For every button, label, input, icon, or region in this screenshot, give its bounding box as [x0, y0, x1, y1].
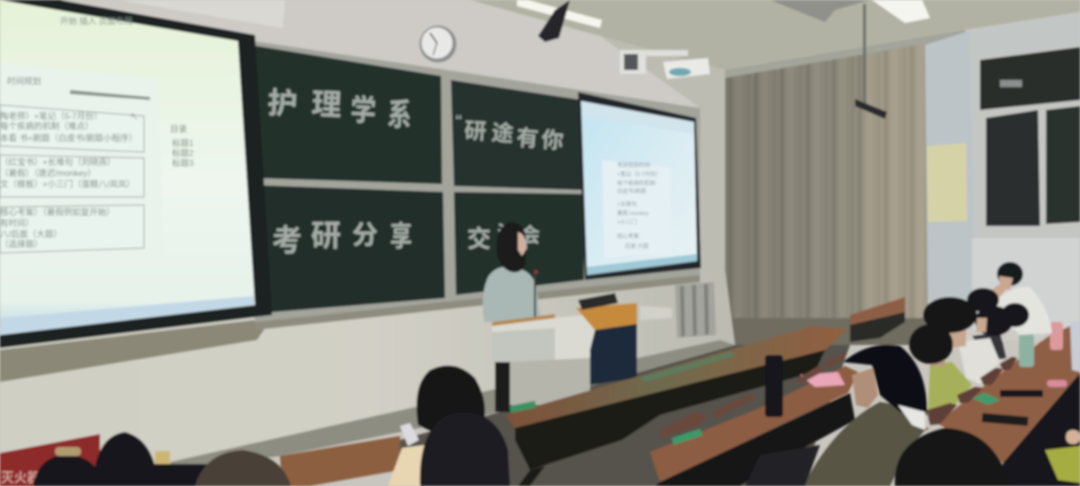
desk row 3 [937, 322, 1080, 486]
curtain [725, 44, 928, 318]
right projection screen [578, 92, 701, 280]
left projection screen: 陶老师）+笔记（5-7月份） [0, 111, 102, 121]
extinguisher sign [0, 434, 100, 486]
student: white shirt [923, 297, 1000, 384]
projector [620, 50, 710, 79]
lectern [492, 293, 672, 405]
blackboard: 交流会 panel: 交 [467, 225, 491, 253]
shadow band below blackboard [255, 272, 700, 330]
blackboard: “研”途有你 panel: 你 [541, 127, 564, 154]
blackboard: 交流会 panel: 会 [520, 224, 540, 247]
blackboard: 考研分享 panel: 考 [272, 225, 302, 258]
chairs right row [888, 357, 1017, 453]
blackboard: “研”途有你 panel: “ [455, 112, 462, 129]
students bottom left [33, 432, 291, 486]
right projection screen: 每个疾病的机制 [617, 179, 656, 187]
upper wall [0, 0, 1080, 340]
left projection screen: 标题1 [172, 138, 194, 148]
left projection screen: 本看 书+刷题（白皮书/刷题小程序） [0, 133, 137, 143]
hand [1066, 430, 1080, 444]
blackboard: 护理学系 panel: 理 [311, 88, 342, 123]
left projection screen: 每个疾病的机制（难点） [0, 121, 94, 131]
blackboard frame [247, 40, 700, 322]
right projection screen: +小三门 [617, 218, 637, 226]
blackboard: 交流会 panel: 流 [497, 222, 517, 245]
blackboard: “研”途有你 panel: 研 [464, 118, 487, 144]
left projection screen: 时间规划 [7, 76, 41, 86]
right projection screen: +长难句 [617, 200, 637, 208]
right projection screen: 暑假 monkey [617, 209, 649, 217]
radiator [675, 282, 716, 338]
small wooden table bottom left [280, 436, 400, 486]
blackboard: 护理学系 panel: 系 [387, 97, 412, 133]
student: seated woman with phone [388, 366, 510, 486]
right projection screen: 后面 大题 [625, 242, 649, 250]
window [979, 45, 1080, 238]
left projection screen: （暑假）（唐迟/monkey） [0, 168, 96, 178]
left projection screen: ↖ [130, 112, 139, 122]
poster [927, 143, 967, 222]
student: man at back [967, 262, 1052, 335]
side wall behind projector [600, 36, 735, 345]
desk row 2 [650, 355, 858, 486]
left projection screen: 标题3 [172, 158, 194, 168]
back small table [850, 297, 905, 342]
blackboard: 考研分享 panel [254, 185, 445, 313]
shadow below left screen [0, 318, 272, 382]
blackboard: 交流会 panel [454, 192, 584, 295]
right projection screen: 白皮书/刷题 [617, 187, 647, 195]
left projection screen: （红宝书）+长难句（刘晓燕） [0, 157, 115, 167]
desk row 1 [505, 326, 847, 486]
screen housing [118, 0, 285, 28]
blackboard: 考研分享 panel: 分 [352, 220, 378, 250]
left projection screen: 八/后面（大题） [0, 229, 62, 239]
desk chairs row 2 [660, 352, 845, 438]
blackboard: “研”途有你 panel [451, 80, 584, 190]
light strips and ceiling fittings [517, 0, 930, 119]
blackboard: “研”途有你 panel: 有 [516, 125, 539, 152]
student: green shirt [909, 324, 972, 410]
dark clothes near bottom [745, 445, 820, 486]
floor [400, 345, 850, 486]
left projection screen: 有时间） [0, 218, 34, 228]
blackboard: “研”途有你 panel: 途 [491, 120, 514, 147]
left projection screen: 核心考案）（暑假例如复开始） [0, 207, 115, 217]
baseboard [170, 340, 735, 470]
blackboard: 考研分享 panel: 享 [390, 221, 412, 253]
student: woman in olive jacket [803, 345, 927, 486]
lower wall [0, 270, 735, 480]
right wall [925, 12, 1080, 330]
wall below curtain [725, 318, 928, 345]
right projection screen: 考研规划时间 [617, 161, 650, 169]
right projection screen: +笔记（5-7月份） [617, 170, 661, 178]
left projection screen: 标题2 [172, 148, 194, 158]
left projection screen: 开始 插入 页面布局 [60, 16, 133, 26]
ceiling [470, 0, 1080, 70]
left projection screen: （选择题） [0, 239, 43, 249]
blackboard: 护理学系 panel: 学 [350, 93, 377, 128]
blackboard: 护理学系 panel [251, 45, 442, 184]
left projection screen [0, 0, 272, 348]
student: head in front right [895, 428, 1010, 486]
student: girl in dark hoodie [972, 306, 1013, 360]
socket box [155, 451, 170, 464]
right projection screen: 核心考案 [617, 232, 640, 240]
wall clock [420, 26, 456, 62]
extinguisher sign: 灭火器 [1, 470, 40, 485]
blackboard: 考研分享 panel: 研 [311, 220, 341, 253]
blackboard: 护理学系 panel: 护 [267, 87, 298, 122]
left projection screen: 文（模板）+小三门（蛋糕八/岚岚） [0, 179, 135, 189]
wall strip above curtain [725, 30, 975, 80]
left projection screen: 目录 [170, 124, 188, 134]
presenter [483, 222, 541, 412]
student at far right [1070, 320, 1080, 372]
green bag [1045, 446, 1080, 483]
